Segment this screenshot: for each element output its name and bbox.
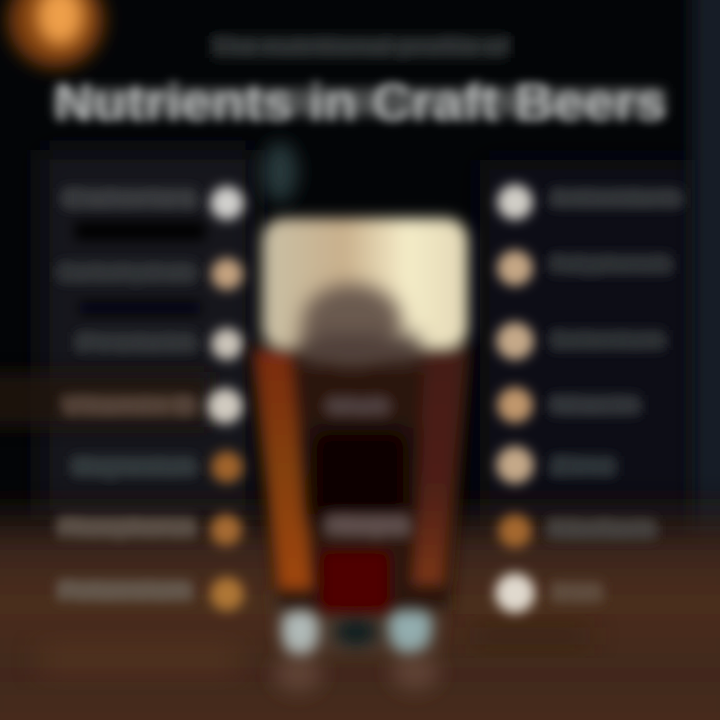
nutrient row 3 left xyxy=(76,328,243,360)
steam above glass xyxy=(262,142,298,202)
nutrient row 4 left xyxy=(62,388,243,424)
glass base xyxy=(272,590,446,692)
label on glass, upper xyxy=(326,394,390,419)
nutrient row 6 left xyxy=(58,514,242,546)
nutrient row 4 left: Vitamin B xyxy=(62,393,196,420)
nutrient row 1 left xyxy=(62,186,244,220)
nutrient row 1 left: Calories xyxy=(62,186,197,213)
nutrient row 1 right: Antioxidants xyxy=(550,185,682,212)
nutrient row 6 right: Riboflavin xyxy=(548,516,656,543)
subtitle: The nutritional profile of xyxy=(210,33,511,60)
nutrient row 1 right xyxy=(497,184,682,220)
panel: right nutrient list xyxy=(495,184,682,613)
glass of dark beer xyxy=(252,218,470,692)
nutrient row 6 left: Phosphorus xyxy=(58,515,196,542)
nutrient row 2 right: Polyphenols xyxy=(550,251,672,278)
icon: glowing lamp xyxy=(8,0,104,68)
nutrient row 6 right xyxy=(498,514,656,548)
wooden table xyxy=(0,372,720,720)
foam head xyxy=(262,218,468,363)
nutrient row 7 left: Potassium xyxy=(58,578,192,605)
nutrient row 5 left: Magnesium xyxy=(72,454,196,481)
nutrient row 4 right xyxy=(497,387,640,423)
nutrient row 5 left xyxy=(72,451,243,483)
nutrient row 3 right: Selenium xyxy=(550,327,665,354)
label on glass, lower: Hops xyxy=(326,512,410,539)
nutrient row 2 left: Carbohydrate xyxy=(58,260,196,287)
nutrient row 3 left: Protein xyxy=(76,330,196,357)
nutrient row 2 right xyxy=(497,250,672,286)
beer body xyxy=(252,345,470,612)
nutrient row 3 right xyxy=(496,322,665,360)
panel: left nutrient list xyxy=(58,186,244,611)
title: Nutrients in Craft Beers xyxy=(54,74,666,132)
label on glass, upper: Malt xyxy=(327,394,390,419)
nutrient row 4 right: Niacin xyxy=(550,392,640,419)
nutrient row 7 right xyxy=(495,573,602,613)
nutrient row 7 left xyxy=(58,577,244,611)
nutrient row 5 right: Zinc xyxy=(550,453,616,480)
nutrient row 7 right: Iron xyxy=(552,579,602,606)
nutrient row 5 right xyxy=(496,446,616,484)
